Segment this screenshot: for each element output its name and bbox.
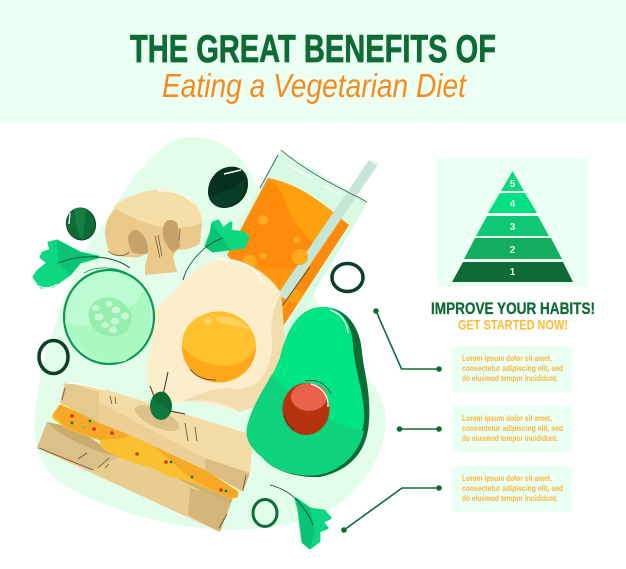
text box 1: do eiusmod tempor incididunt.: [462, 374, 558, 383]
top bread slice: [65, 382, 253, 473]
ring: bottom: [253, 500, 277, 526]
right leaf: [183, 221, 248, 280]
left leaf: [34, 240, 130, 288]
cucumber seeds: [82, 290, 138, 344]
connector line 2: [397, 426, 442, 432]
sandwich filling: [53, 405, 238, 498]
subtitle: Eating a Vegetarian Diet: [162, 67, 468, 104]
text box 1: consectetur adipiscing elit, sed: [462, 364, 563, 373]
fried egg: [147, 258, 290, 412]
background blob: [35, 137, 386, 530]
yolk: [182, 312, 256, 382]
pyramid level 4: [488, 193, 537, 213]
text box 3: consectetur adipiscing elit, sed: [462, 484, 563, 493]
glass of orange juice: [215, 150, 378, 345]
avocado pit: [282, 383, 330, 435]
bottom bread slice: [37, 422, 233, 532]
avocado: [247, 307, 369, 477]
text box 2: Lorem ipsum dolor sit amet,: [462, 414, 552, 423]
text box 1: [452, 346, 572, 392]
pyramid level 3: [476, 216, 549, 236]
pyramid level 2: 2: [510, 245, 516, 256]
pyramid level 3: 3: [510, 222, 516, 233]
pyramid level 4: 4: [510, 199, 516, 210]
pyramid level 5: [501, 171, 524, 191]
text box 3: [452, 466, 572, 512]
pyramid level 1: [452, 262, 573, 282]
text box 3: do eiusmod tempor incididunt.: [462, 494, 558, 503]
get started subheading: GET STARTED NOW!: [458, 316, 568, 332]
pyramid level 5: 5: [510, 179, 516, 190]
ring: left: [39, 340, 68, 374]
text box 2: do eiusmod tempor incididunt.: [462, 434, 558, 443]
header band: [0, 0, 626, 122]
pyramid level 1: 1: [510, 267, 516, 278]
pyramid panel: [437, 158, 588, 287]
title: THE GREAT BENEFITS OF: [130, 28, 496, 71]
pyramid level 2: [464, 238, 562, 259]
juice: [227, 178, 349, 328]
text box 1: Lorem ipsum dolor sit amet,: [462, 354, 552, 363]
dark olive: [208, 167, 248, 208]
mushroom: [105, 190, 202, 275]
cucumber slice: [64, 268, 154, 364]
small green olive: [63, 205, 99, 243]
bottom leaf: [270, 485, 330, 549]
straw: [282, 163, 373, 297]
olive with toothpick: [150, 372, 185, 420]
text box 2: consectetur adipiscing elit, sed: [462, 424, 563, 433]
text box 2: [452, 406, 572, 452]
sandwich: [37, 382, 253, 532]
text box 3: Lorem ipsum dolor sit amet,: [462, 474, 552, 483]
connector line 1: [373, 308, 442, 372]
ring: top right: [332, 264, 363, 292]
connector line 3: [341, 485, 442, 533]
